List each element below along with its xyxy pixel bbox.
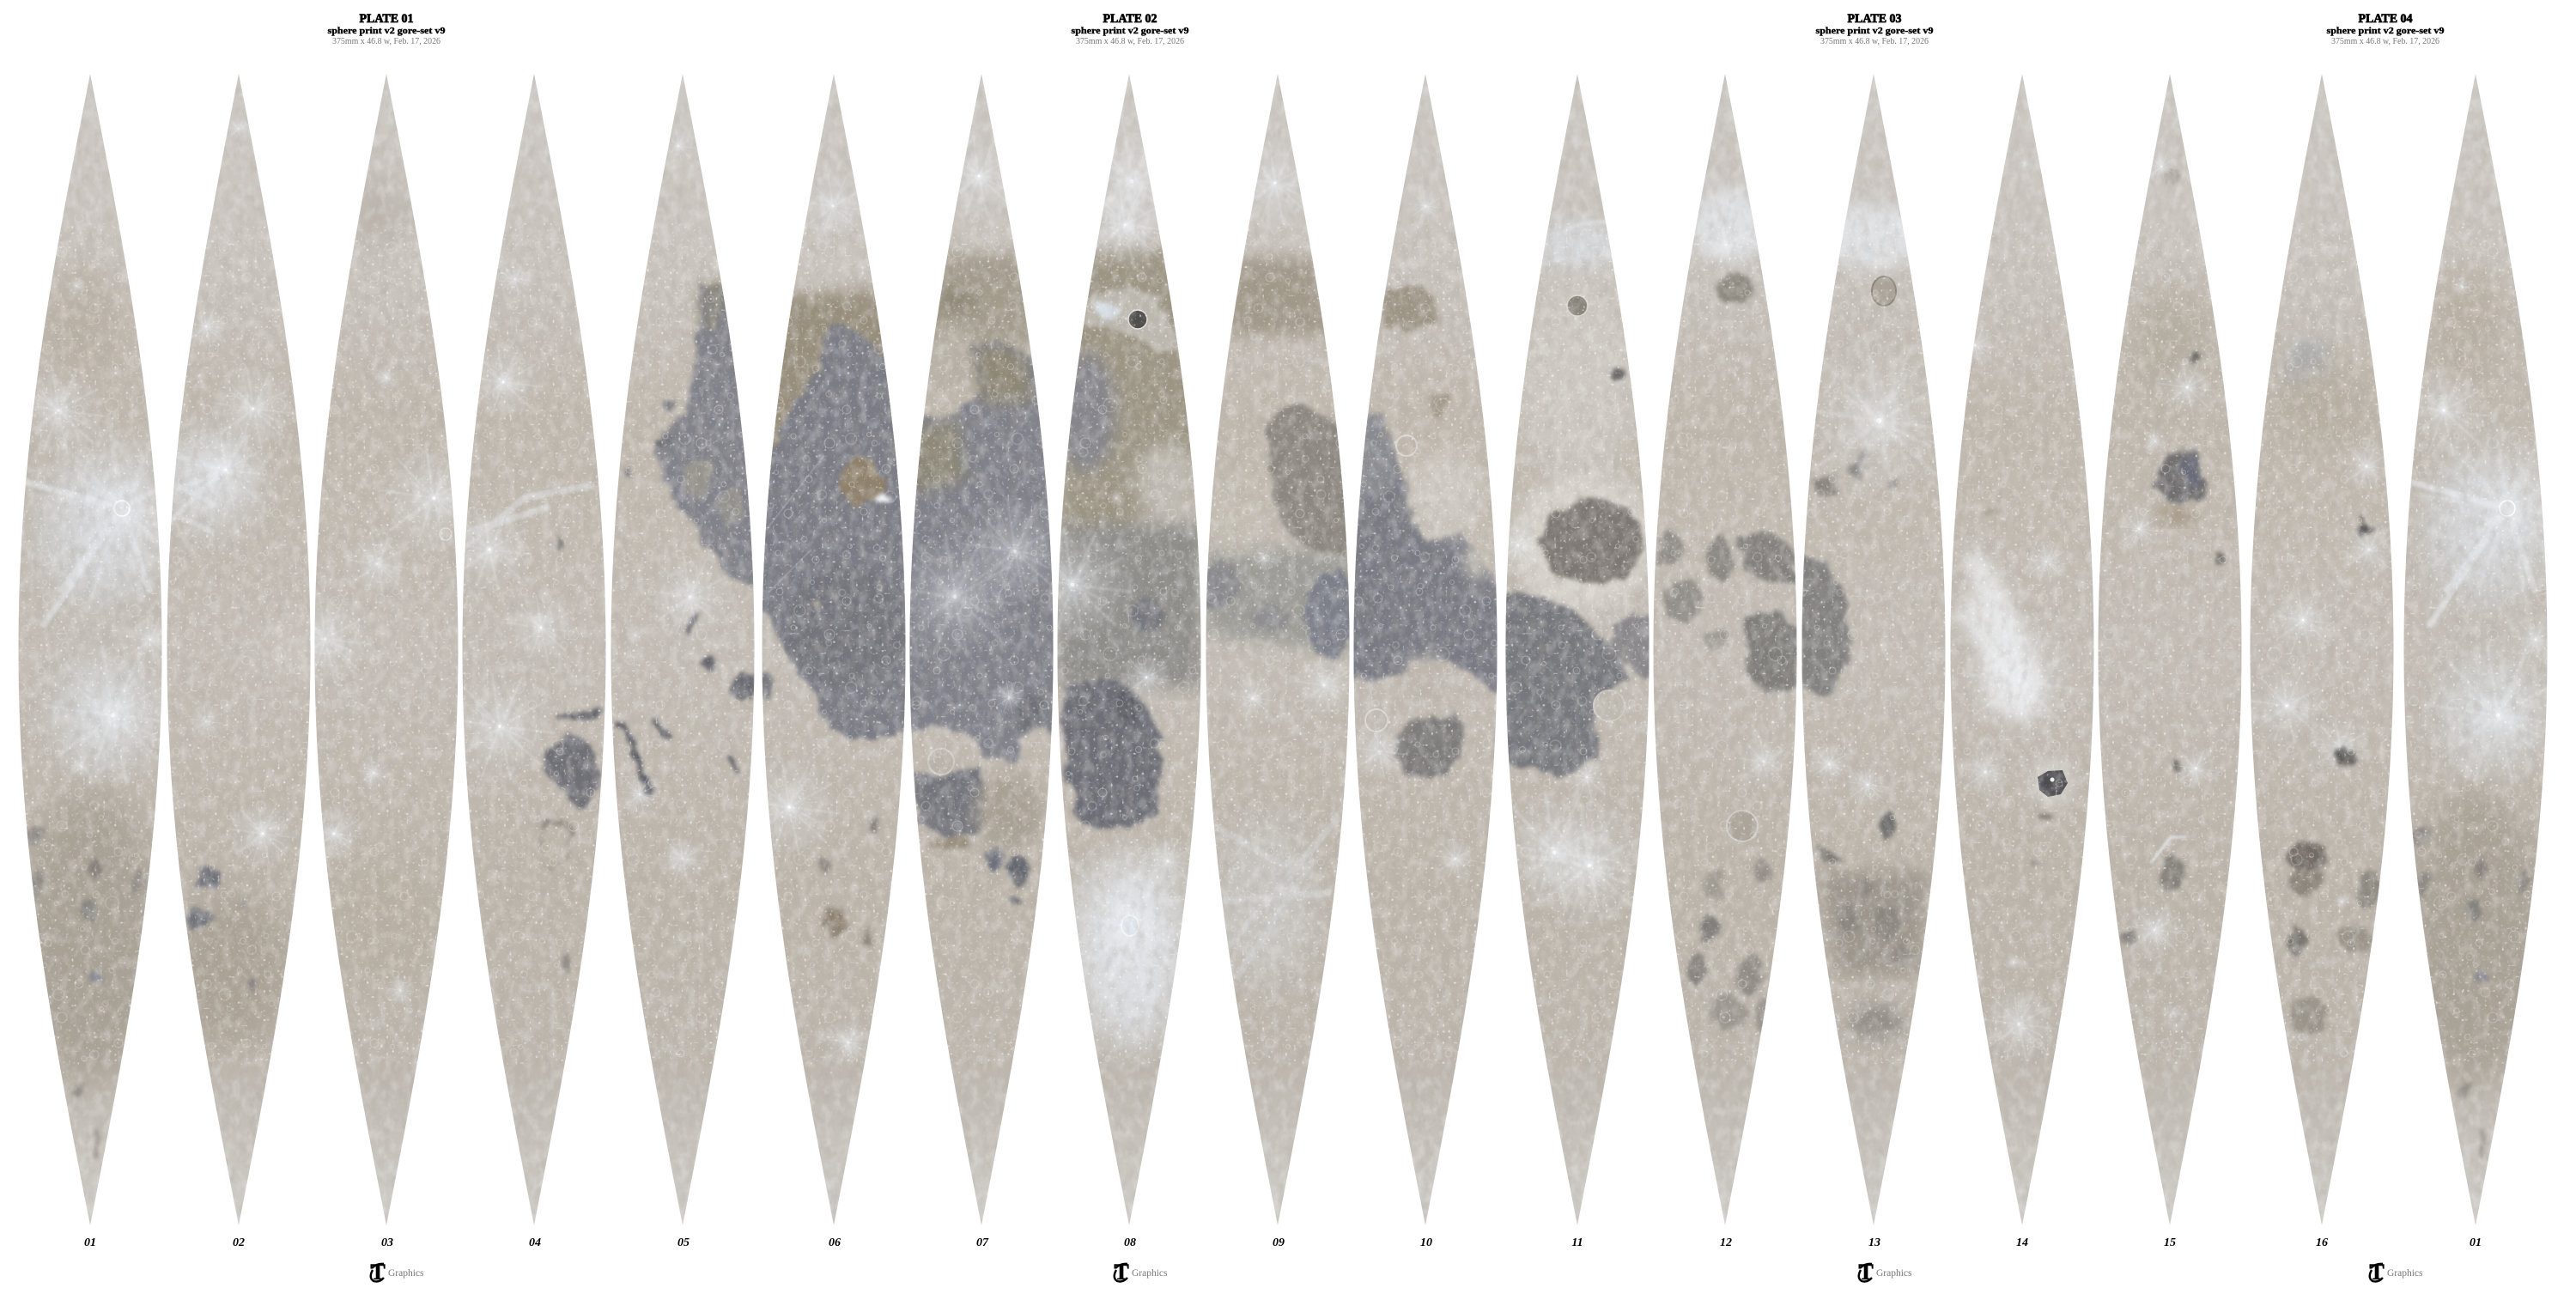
- gore numbers: 11: [1571, 1236, 1583, 1249]
- dark mare: Moscoviense: [2121, 168, 2222, 943]
- plate 01 header: [328, 12, 446, 46]
- logo: plate 02: Graphics: [1132, 1268, 1168, 1279]
- gore numbers: 09: [1273, 1236, 1285, 1249]
- ray crater: [738, 756, 841, 859]
- gore numbers: 12: [1720, 1236, 1732, 1249]
- gore 13: [1793, 69, 1965, 1231]
- gore numbers: 03: [381, 1236, 393, 1249]
- gore numbers: 01: [2470, 1236, 2482, 1249]
- mare: Oceanus Procellarum: [726, 319, 910, 948]
- plate 02 header: sphere print v2 gore-set v9: [1072, 26, 1189, 36]
- gore numbers: 08: [1124, 1236, 1136, 1249]
- gore numbers: 01: [84, 1236, 96, 1249]
- gore 05: [606, 69, 761, 1231]
- gore numbers: 06: [829, 1236, 841, 1249]
- plate 03 header: sphere print v2 gore-set v9: [1815, 26, 1934, 36]
- mare: Crisium: [1503, 368, 1653, 777]
- Copernicus rays: [890, 532, 1019, 661]
- logo: plate 04: Graphics: [2387, 1268, 2423, 1279]
- plate 01 header: PLATE 01: [359, 12, 414, 26]
- dark mottled craters: [2286, 518, 2382, 1035]
- gore 10: [1348, 69, 1503, 1231]
- gore numbers: 14: [2016, 1236, 2028, 1249]
- logo: plate 02: [1114, 1260, 1168, 1285]
- sinus iridum highlands: [1061, 288, 1183, 831]
- logo: plate 03: T: [1858, 1260, 1874, 1285]
- plate 03 header: [1815, 12, 1934, 46]
- plate 04 header: 375mm x 46.8 w, Feb. 17, 2026: [2331, 36, 2439, 46]
- logo: plate 03: Graphics: [1876, 1268, 1912, 1279]
- gore numbers: 07: [976, 1236, 989, 1249]
- gore 12: [1649, 69, 1803, 1231]
- gore 15: [2092, 69, 2246, 1231]
- mare: Imbrium west: [902, 342, 1065, 905]
- small bright specks: [0, 223, 2576, 1065]
- Aristarchus plateau: [840, 455, 883, 508]
- gore 04: [444, 69, 613, 1231]
- gore 16: [2243, 69, 2397, 1231]
- gore 09: [1201, 69, 1357, 1231]
- gore 11: [1490, 69, 1656, 1231]
- gore numbers: 02: [233, 1236, 245, 1249]
- plate 01 header: 375mm x 46.8 w, Feb. 17, 2026: [332, 36, 440, 46]
- gore 02: [167, 74, 311, 1224]
- gore numbers: 10: [1420, 1236, 1432, 1249]
- logo: plate 01: Graphics: [388, 1268, 424, 1279]
- mare body: [659, 285, 760, 592]
- gore 07: [890, 69, 1071, 1231]
- plate 02 header: PLATE 02: [1103, 12, 1157, 26]
- gore 06: [726, 69, 912, 1231]
- plate 04 header: sphere print v2 gore-set v9: [2327, 26, 2445, 36]
- Tycho ray system: [1077, 859, 1183, 1048]
- gore 08: [1012, 69, 1224, 1231]
- gore numbers: 16: [2316, 1236, 2328, 1249]
- logo: plate 02: T: [1114, 1260, 1129, 1285]
- plate 02 header: 375mm x 46.8 w, Feb. 17, 2026: [1076, 36, 1184, 46]
- mare: Serenitatis and Tranquillitatis: [1348, 412, 1503, 696]
- ray streak: [1962, 550, 2031, 717]
- gore 14: [1944, 69, 2099, 1231]
- logo: plate 01: [370, 1260, 424, 1285]
- plate 03 header: PLATE 03: [1848, 12, 1901, 26]
- dark mare patch: [539, 534, 603, 974]
- larger crater rings: [0, 215, 2576, 1073]
- plate 01 header: sphere print v2 gore-set v9: [328, 26, 446, 36]
- gore numbers: 13: [1868, 1236, 1880, 1249]
- mare: Imbrium east: [1201, 404, 1357, 657]
- gore 01 repeated at right: [2397, 69, 2576, 1231]
- logo: plate 04: T: [2369, 1260, 2385, 1285]
- plate 02 header: [1072, 12, 1189, 46]
- logo: plate 01: T: [370, 1260, 386, 1285]
- gore 01: [11, 69, 221, 1231]
- dark rilles: [615, 614, 737, 794]
- gore numbers: [84, 1236, 2482, 1249]
- plate 04 header: [2327, 12, 2445, 46]
- logo: plate 04: [2369, 1260, 2423, 1285]
- logo: plate 03: [1858, 1260, 1912, 1285]
- Tycho rays continuation: [1211, 816, 1340, 979]
- gore 03: [314, 74, 459, 1224]
- small crater rings: [0, 215, 2576, 1073]
- gore numbers: 15: [2164, 1236, 2176, 1249]
- rays: [172, 454, 219, 534]
- gore numbers: 04: [529, 1236, 541, 1249]
- plate 03 header: 375mm x 46.8 w, Feb. 17, 2026: [1820, 36, 1929, 46]
- crater glow: northern ray crater: [23, 410, 221, 607]
- dark crater: [2038, 770, 2068, 797]
- plate 04 header: PLATE 04: [2358, 12, 2413, 26]
- gore numbers: 05: [677, 1236, 690, 1249]
